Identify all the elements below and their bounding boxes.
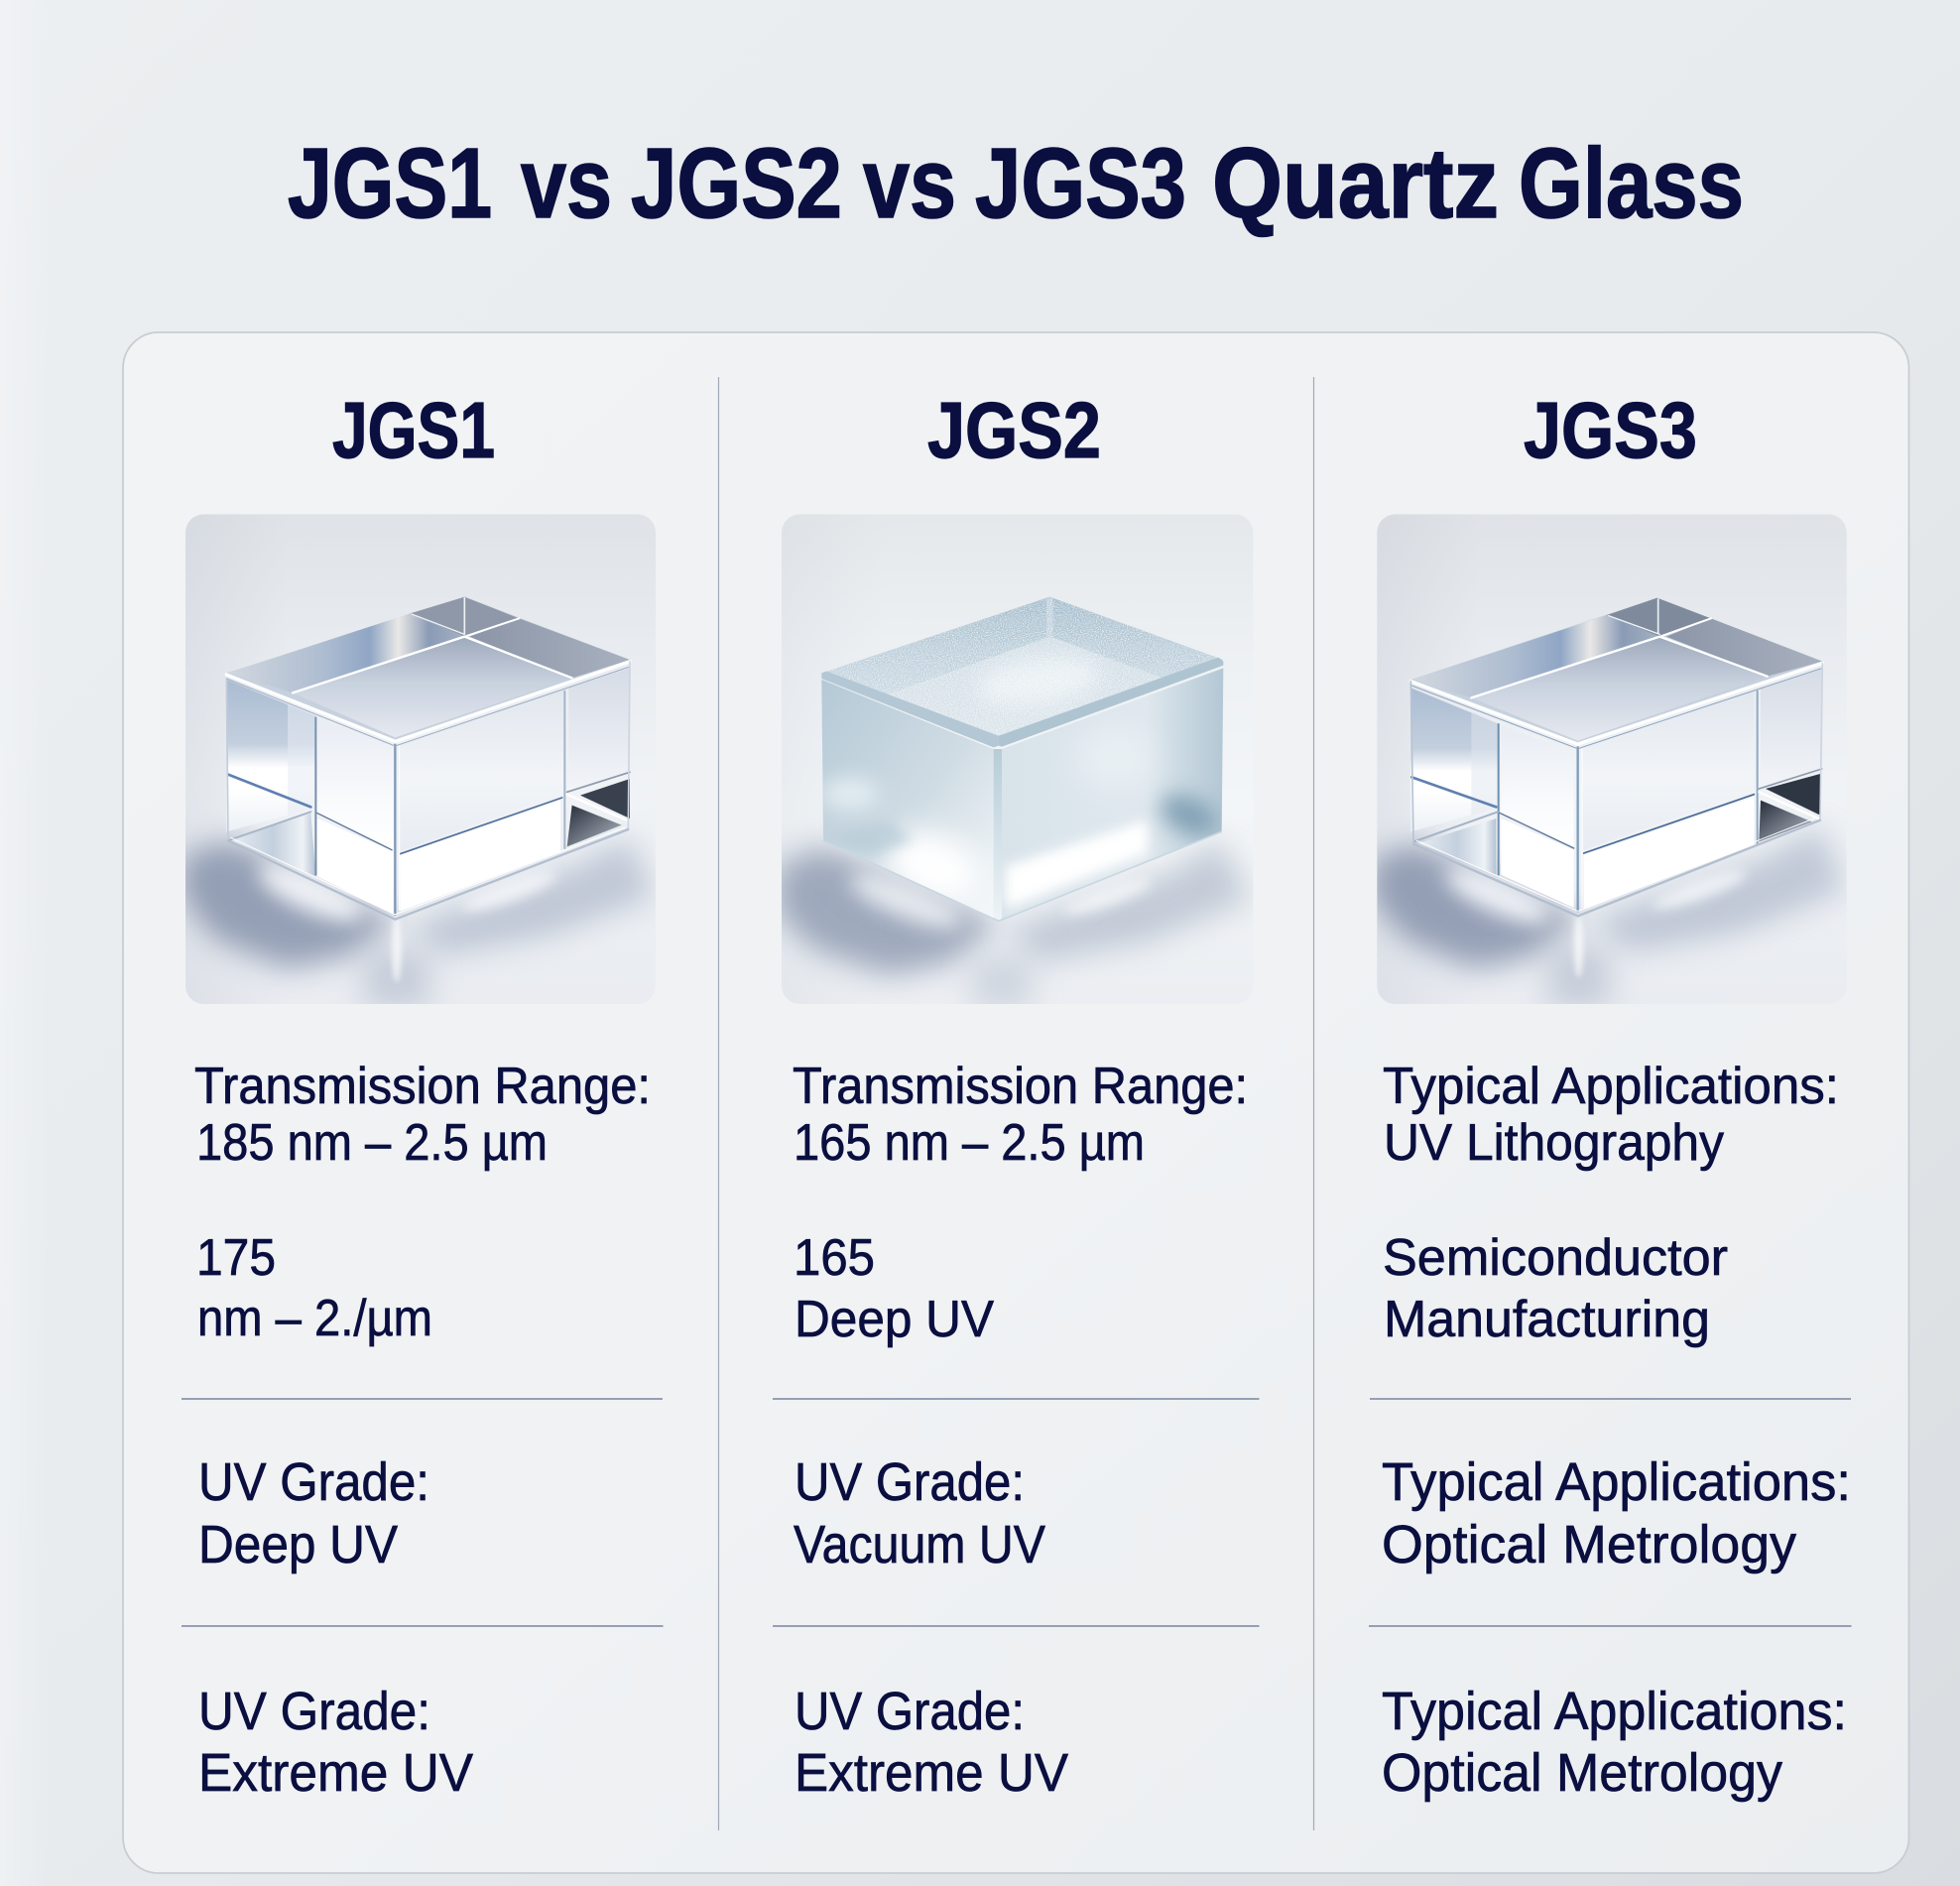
image: clear JGS1 quartz block (182, 514, 656, 1009)
text: optical metrology (1382, 1682, 1847, 1803)
panel: JGS1 (182, 386, 663, 1803)
image: frosted JGS2 quartz block (777, 514, 1253, 1009)
text: optical metrology (1382, 1452, 1851, 1574)
title: JGS2 (631, 128, 842, 239)
panel: JGS3 (1369, 386, 1851, 1803)
text: UV grade deep (198, 1452, 429, 1574)
title: Quartz (1212, 128, 1499, 239)
text: typical applications: Typical Applications: (1383, 1058, 1839, 1115)
text: UV grade extreme: UV Grade: (198, 1682, 430, 1741)
text: transmission range: 185 nm – 2.5 µm (196, 1114, 548, 1172)
text: semiconductor manufacturing: Semiconductor (1383, 1229, 1728, 1287)
text: optical metrology: Typical Applications: (1382, 1452, 1851, 1512)
text: optical metrology: Optical Metrology (1382, 1515, 1796, 1574)
text: transmission range: Transmission Range: (793, 1058, 1248, 1115)
text: UV grade vacuum (794, 1452, 1045, 1574)
text: UV grade vacuum: UV Grade: (795, 1452, 1025, 1512)
row divider (1370, 1398, 1851, 1400)
text: secondary range: 175 (196, 1229, 276, 1287)
text: transmission range: Transmission Range: (194, 1058, 651, 1115)
text: semiconductor manufacturing: Manufacturing (1384, 1291, 1710, 1348)
text: UV grade extreme: UV Grade: (795, 1682, 1025, 1741)
text: transmission range (793, 1058, 1248, 1172)
title: vs (521, 128, 612, 239)
heading: JGS3: JGS3 (1524, 386, 1697, 474)
text: deep UV limit: Deep UV (795, 1291, 994, 1348)
title: vs (863, 128, 956, 239)
title: JGS1 (288, 128, 492, 239)
text: UV grade extreme: Extreme UV (795, 1743, 1068, 1803)
title: JGS3 (975, 128, 1186, 239)
row divider (773, 1625, 1260, 1627)
text: deep UV limit (794, 1229, 994, 1348)
text: typical applications: UV Lithography (1384, 1114, 1724, 1172)
text: optical metrology: Optical Metrology (1382, 1743, 1782, 1803)
text: UV grade deep: UV Grade: (198, 1452, 429, 1512)
text: semiconductor manufacturing (1383, 1229, 1728, 1348)
text: deep UV limit: 165 (794, 1229, 875, 1287)
text: UV grade vacuum: Vacuum UV (794, 1515, 1045, 1574)
row divider (773, 1398, 1260, 1400)
comparison card (123, 332, 1908, 1873)
text: transmission range: 165 nm – 2.5 µm (794, 1114, 1145, 1172)
heading: JGS2: JGS2 (927, 386, 1101, 474)
row divider (182, 1625, 663, 1627)
text: UV grade extreme: Extreme UV (198, 1743, 473, 1803)
text: secondary range: nm – 2./µm (197, 1290, 432, 1347)
text: UV grade extreme (198, 1682, 473, 1803)
title: Glass (1519, 128, 1744, 239)
text: secondary range (196, 1229, 432, 1347)
text: UV grade deep: Deep UV (198, 1515, 398, 1574)
text: typical applications (1383, 1058, 1839, 1172)
title (288, 128, 1744, 239)
column divider 2 (1313, 377, 1315, 1830)
panel: JGS2 (773, 386, 1260, 1803)
text: optical metrology: Typical Applications: (1382, 1682, 1847, 1741)
text: UV grade extreme (795, 1682, 1068, 1803)
row divider (1369, 1625, 1851, 1627)
image: clear JGS3 quartz block (1372, 514, 1847, 1009)
row divider (182, 1398, 663, 1400)
text: transmission range (194, 1058, 651, 1172)
heading: JGS1: JGS1 (332, 386, 495, 474)
column divider 1 (718, 377, 720, 1830)
